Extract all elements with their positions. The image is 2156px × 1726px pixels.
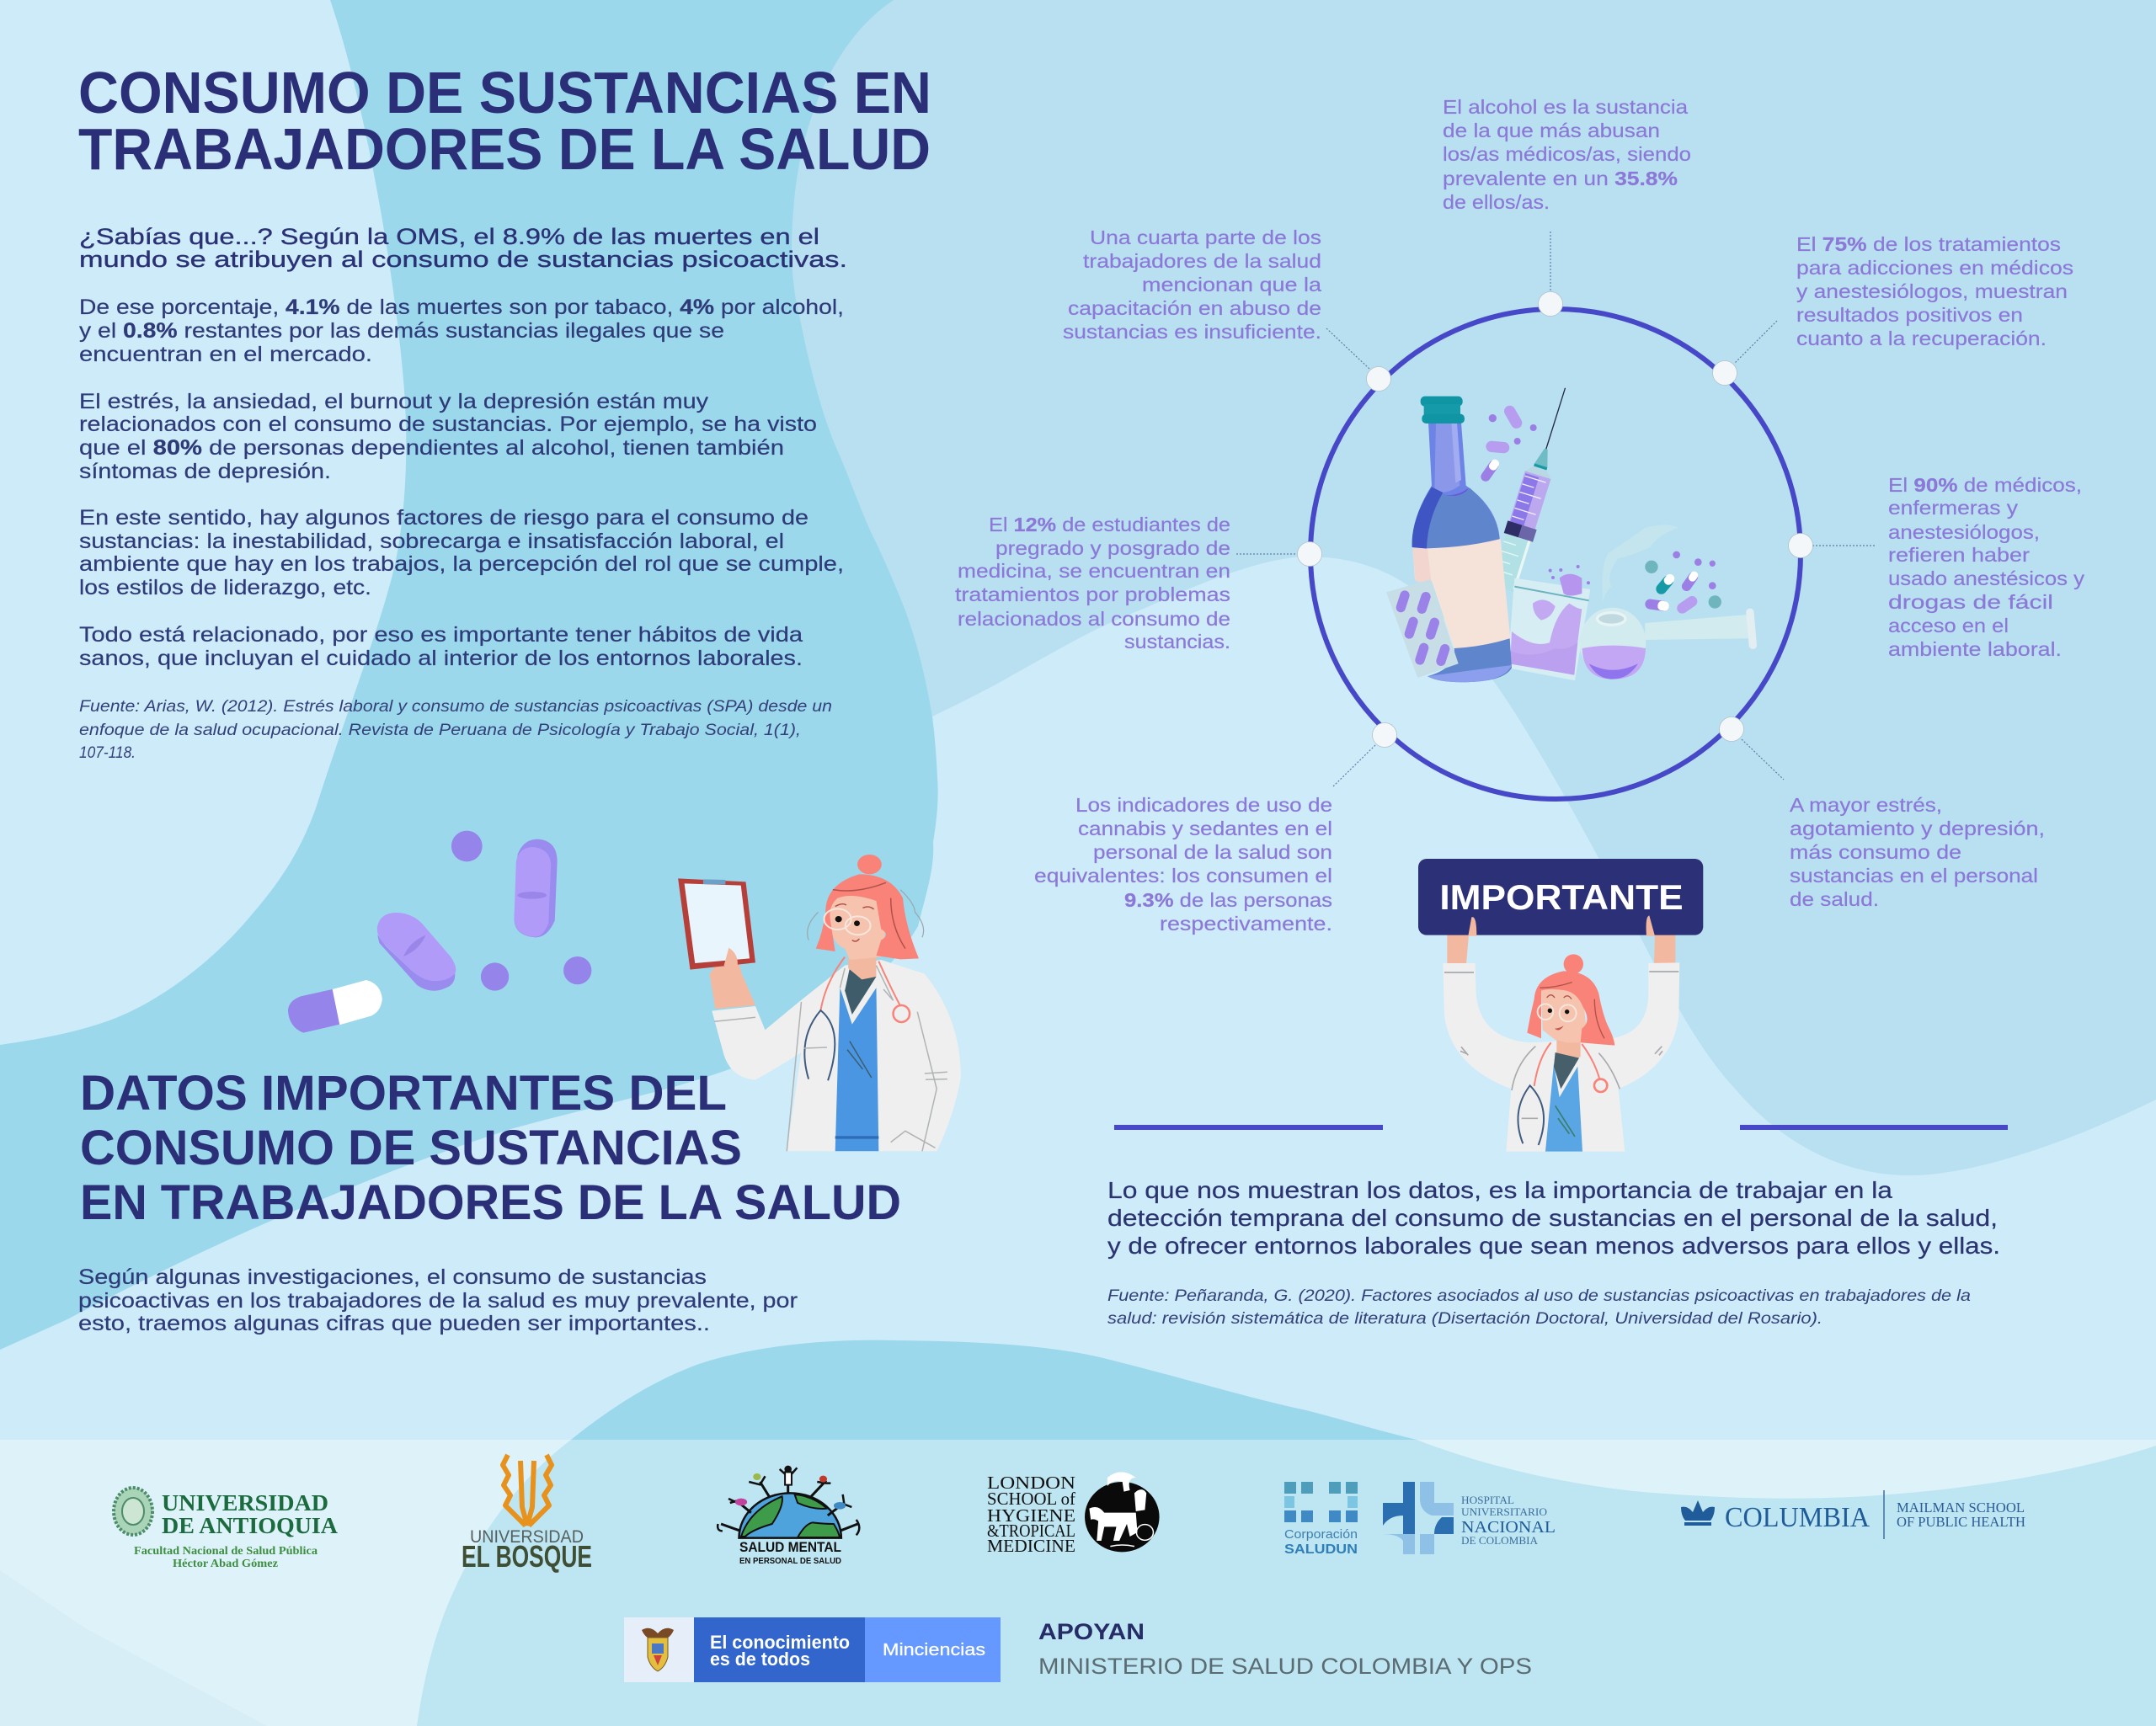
logo: London School of Hygiene & Tropical Medicine: &TROPICAL	[987, 1521, 1075, 1541]
paragraph: stress: síntomas de depresión.	[79, 460, 331, 483]
paragraph: habits: Todo está relacionado, por eso es importante tener hábitos de vida	[79, 623, 803, 647]
paragraph: risk factors: los estilos de liderazgo, etc.	[79, 576, 371, 599]
callout: capacitación: sustancias es insuficiente.	[1063, 321, 1321, 343]
logo: London School of Hygiene & Tropical Medicine: MEDICINE	[987, 1536, 1075, 1556]
sign	[1418, 859, 1703, 935]
title	[78, 60, 931, 182]
logo: Universidad El Bosque: EL BOSQUE	[462, 1539, 592, 1574]
callout: estudiantes	[955, 514, 1230, 653]
callout: mayor estrés: sustancias en el personal	[1790, 865, 2038, 887]
syringe	[1488, 383, 1580, 593]
bag	[1508, 565, 1590, 680]
callout: alcohol: prevalente en un 35.8%	[1443, 168, 1678, 189]
paragraph: habits	[79, 623, 803, 670]
callout: 90 por ciento: refieren haber	[1888, 544, 2030, 566]
paragraph: percentages: y el 0.8% restantes por las demás sustancias ilegales que se	[79, 319, 724, 343]
callout: 90 por ciento: anestesiólogos,	[1888, 521, 2040, 543]
logo: Universidad de Antioquia: Facultad Nacional de Salud Pública	[134, 1545, 318, 1558]
logo: Columbia Mailman School	[1681, 1490, 2025, 1539]
paragraph: risk factors: ambiente que hay en los trabajos, la percepción del rol que se cumple,	[79, 552, 844, 576]
callout: cannabis: personal de la salud son	[1093, 841, 1332, 863]
logo: Universidad El Bosque	[462, 1455, 592, 1574]
logo: London School of Hygiene & Tropical Medicine: SCHOOL of	[987, 1489, 1075, 1509]
text: apoyan: MINISTERIO DE SALUD COLOMBIA Y OPS	[1038, 1654, 1532, 1679]
divider bars	[1114, 1125, 2008, 1130]
paragraph: habits: sanos, que incluyan el cuidado al interior de los entornos laborales.	[79, 647, 803, 670]
sign: IMPORTANTE	[1439, 877, 1684, 917]
conclusion text: Lo que nos muestran los datos, es la importancia de trabajar en la	[1107, 1177, 1892, 1203]
logo: Universidad de Antioquia: Héctor Abad Gómez	[173, 1558, 278, 1570]
logo: Minciencias: El conocimiento	[710, 1632, 850, 1653]
paragraph: risk factors: sustancias: la inestabilidad, sobrecarga e insatisfacción laboral, el	[79, 530, 784, 553]
paragraph: stress	[79, 390, 817, 483]
callout: tratamientos: El 75% de los tratamientos	[1796, 233, 2061, 255]
callout: capacitación	[1063, 226, 1322, 343]
title: TRABAJADORES DE LA SALUD	[78, 116, 931, 182]
source: Peñaranda: salud: revisión sistemática de literatura (Disertación Doctoral, Universidad del Rosario).	[1107, 1310, 1822, 1328]
logo: Minciencias: es de todos	[710, 1649, 810, 1670]
callout: alcohol: de ellos/as.	[1443, 191, 1550, 213]
logo: Hospital Universitario Nacional: UNIVERSITARIO	[1461, 1505, 1547, 1518]
callout: estudiantes: relacionados al consumo de	[958, 608, 1230, 630]
paragraph: percentages: De ese porcentaje, 4.1% de las muertes son por tabaco, 4% por alcohol,	[79, 296, 844, 319]
intro text	[79, 224, 847, 272]
callout: cannabis: cannabis y sedantes en el	[1078, 818, 1332, 839]
callout: cannabis: equivalentes: los consumen el	[1034, 865, 1332, 887]
callout: 90 por ciento: El 90% de médicos,	[1888, 474, 2082, 496]
callout: capacitación: Una cuarta parte de los	[1090, 226, 1321, 248]
logo: London School of Hygiene & Tropical Medicine	[987, 1472, 1160, 1556]
callout: mayor estrés: A mayor estrés,	[1790, 794, 1942, 816]
callout: cannabis: 9.3% de las personas	[1124, 889, 1332, 911]
callout: mayor estrés: agotamiento y depresión,	[1790, 818, 2045, 839]
callout: capacitación: capacitación en abuso de	[1068, 297, 1321, 319]
callout: tratamientos: y anestesiólogos, muestran	[1796, 280, 2068, 302]
logo: London School of Hygiene & Tropical Medicine: HYGIENE	[987, 1505, 1075, 1526]
intro text: ¿Sabías que...? Según la OMS, el 8.9% de las muertes en el	[79, 224, 819, 249]
small pills	[1479, 403, 1721, 615]
logo: Columbia Mailman School: COLUMBIA	[1725, 1502, 1870, 1533]
callout: alcohol: El alcohol es la sustancia	[1443, 96, 1689, 118]
logo: Corporación SaludUN: SALUDUN	[1284, 1542, 1358, 1557]
logo: Salud Mental: EN PERSONAL DE SALUD	[739, 1557, 841, 1566]
logo: Minciencias: Minciencias	[883, 1641, 985, 1659]
callout: mayor estrés	[1790, 794, 2045, 910]
paragraph: risk factors	[79, 506, 844, 599]
conclusion text	[1107, 1177, 2000, 1259]
logo: Corporación SaludUN: Corporación	[1284, 1527, 1358, 1542]
logo: Hospital Universitario Nacional: NACIONAL	[1461, 1518, 1556, 1537]
logo: Universidad de Antioquia: UNIVERSIDAD	[162, 1490, 328, 1516]
logo: Columbia Mailman School: OF PUBLIC HEALTH	[1897, 1514, 2025, 1530]
callout: 90 por ciento: enfermeras y	[1888, 497, 2018, 519]
paragraph: stress: relacionados con el consumo de sustancias. Por ejemplo, se ha visto	[79, 413, 817, 436]
callout: estudiantes: pregrado y posgrado de	[995, 537, 1230, 559]
text: investigaciones: esto, traemos algunas cifras que pueden ser importantes..	[78, 1312, 710, 1335]
callout: alcohol: los/as médicos/as, siendo	[1443, 143, 1691, 165]
blister	[1386, 579, 1459, 678]
callout: mayor estrés: más consumo de	[1790, 841, 1961, 863]
logo: Salud Mental: SALUD MENTAL	[739, 1539, 841, 1555]
source: Arias: 107-118.	[79, 744, 136, 762]
callout: alcohol: de la que más abusan	[1443, 120, 1660, 141]
callout: cannabis: respectivamente.	[1160, 913, 1332, 935]
callout: tratamientos: cuanto a la recuperación.	[1796, 328, 2047, 349]
logo: London School of Hygiene & Tropical Medicine: LONDON	[987, 1473, 1075, 1493]
source: Peñaranda	[1107, 1287, 1971, 1328]
callout: cannabis: Los indicadores de uso de	[1075, 794, 1332, 816]
illustration: bottle, syringe, pills and pipe	[1386, 383, 1757, 682]
logo: Columbia Mailman School: MAILMAN SCHOOL	[1897, 1500, 2025, 1516]
text: apoyan: APOYAN	[1038, 1619, 1145, 1644]
logo: Minciencias	[624, 1617, 1001, 1682]
conclusion text: y de ofrecer entornos laborales que sean menos adversos para ellos y ellas.	[1107, 1233, 2000, 1259]
logo: Corporación SaludUN	[1284, 1482, 1358, 1557]
callout: 90 por ciento: usado anestésicos y	[1888, 567, 2084, 589]
text: investigaciones	[78, 1265, 798, 1335]
logo: Hospital Universitario Nacional	[1383, 1482, 1556, 1554]
paragraph: percentages	[79, 296, 844, 366]
pipe	[1580, 525, 1757, 679]
source: Arias: enfoque de la salud ocupacional. Revista de Peruana de Psicología y Trabajo Social, 1(1),	[79, 722, 801, 739]
callout: estudiantes: sustancias.	[1124, 631, 1230, 653]
logo: Salud Mental	[718, 1466, 859, 1566]
callout: tratamientos	[1796, 233, 2073, 349]
illustration: doctor holding sign	[1418, 859, 1703, 1152]
text: investigaciones: psicoactivas en los trabajadores de la salud es muy prevalente, por	[78, 1289, 798, 1313]
callout: capacitación: mencionan que la	[1142, 274, 1322, 296]
illustration: doctor with clipboard	[678, 855, 961, 1151]
source: Peñaranda: Fuente: Peñaranda, G. (2020). Factores asociados al uso de sustancias psicoactivas en trabajadores de la	[1107, 1287, 1971, 1305]
callout: tratamientos: resultados positivos en	[1796, 304, 2023, 326]
callout: 90 por ciento	[1888, 474, 2084, 660]
conclusion text: detección temprana del consumo de sustancias en el personal de la salud,	[1107, 1205, 1998, 1231]
source: Arias	[79, 698, 832, 762]
heading: datos importantes	[80, 1066, 901, 1230]
callout: tratamientos: para adicciones en médicos	[1796, 257, 2073, 279]
logo: Universidad de Antioquia: DE ANTIOQUIA	[162, 1513, 339, 1538]
callout: alcohol	[1443, 96, 1691, 213]
bottle	[1412, 397, 1512, 682]
heading: datos importantes: CONSUMO DE SUSTANCIAS	[80, 1121, 742, 1175]
callout: 90 por ciento: acceso en el	[1888, 615, 2009, 637]
icon: large pills	[288, 831, 591, 1033]
callout: estudiantes: medicina, se encuentran en	[958, 560, 1230, 582]
text: investigaciones: Según algunas investigaciones, el consumo de sustancias	[78, 1265, 707, 1289]
logo: Hospital Universitario Nacional: HOSPITAL	[1461, 1494, 1514, 1506]
logo: Hospital Universitario Nacional: DE COLOMBIA	[1461, 1534, 1539, 1547]
logo: Universidad de Antioquia	[114, 1488, 339, 1570]
title: CONSUMO DE SUSTANCIAS EN	[78, 60, 931, 125]
paragraph: risk factors: En este sentido, hay algunos factores de riesgo para el consumo de	[79, 506, 808, 530]
heading: datos importantes: DATOS IMPORTANTES DEL	[80, 1066, 727, 1121]
paragraph: stress: El estrés, la ansiedad, el burnout y la depresión están muy	[79, 390, 709, 413]
source: Arias: Fuente: Arias, W. (2012). Estrés laboral y consumo de sustancias psicoactivas (SPA) desde un	[79, 698, 832, 716]
callout: estudiantes: El 12% de estudiantes de	[989, 514, 1230, 535]
callout: mayor estrés: de salud.	[1790, 888, 1879, 910]
callout: capacitación: trabajadores de la salud	[1083, 250, 1321, 272]
callout: estudiantes: tratamientos por problemas	[955, 583, 1230, 605]
heading: datos importantes: EN TRABAJADORES DE LA SALUD	[80, 1175, 901, 1230]
callout: 90 por ciento: drogas de fácil	[1888, 591, 2053, 613]
callout: cannabis	[1034, 794, 1332, 935]
intro text: mundo se atribuyen al consumo de sustancias psicoactivas.	[79, 247, 847, 272]
callout: 90 por ciento: ambiente laboral.	[1888, 638, 2062, 660]
paragraph: percentages: encuentran en el mercado.	[79, 343, 372, 366]
circle diagram	[1236, 232, 1876, 799]
paragraph: stress: que el 80% de personas dependientes al alcohol, tienen también	[79, 436, 784, 460]
logo: Universidad El Bosque: UNIVERSIDAD	[470, 1527, 584, 1547]
text: apoyan	[1038, 1619, 1532, 1679]
